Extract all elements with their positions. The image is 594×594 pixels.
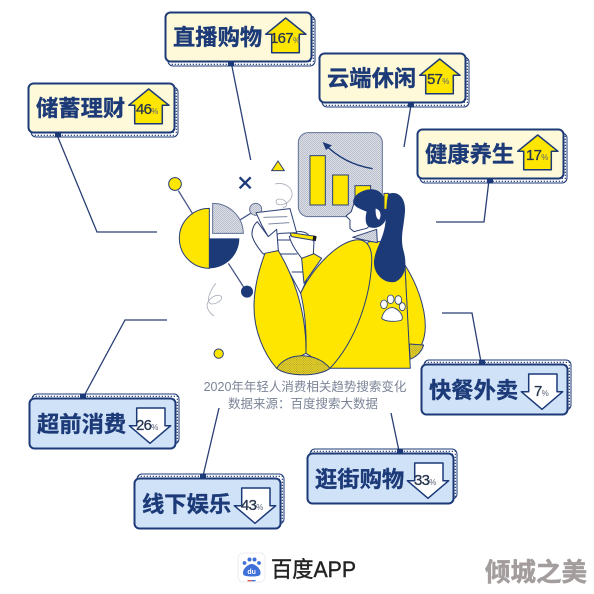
label: 直播购物 +167%: 直播购物 bbox=[173, 25, 262, 50]
paw print bbox=[381, 295, 405, 321]
source caption: 2020年年轻人消费相关趋势搜索变化 bbox=[204, 379, 407, 394]
left hand bbox=[252, 222, 278, 254]
icon: cross bbox=[240, 177, 251, 188]
label: 云端休闲 +57% bbox=[320, 54, 469, 107]
label: 超前消费 -26% bbox=[30, 394, 179, 448]
label: 云端休闲 +57%: 57% bbox=[427, 71, 449, 88]
label: 逛街购物 -33%: 33% bbox=[414, 472, 436, 489]
rear sleeve bbox=[405, 265, 425, 359]
left sleeve bbox=[254, 251, 306, 368]
label: 储蓄理财 +46% bbox=[28, 84, 178, 137]
icon: triangle bbox=[272, 161, 284, 171]
small yellow circle bbox=[214, 349, 223, 358]
label: 线下娱乐 -43%: 线下娱乐 bbox=[142, 492, 231, 517]
label: 健康养生 +17%: 健康养生 bbox=[425, 141, 514, 167]
source caption: 数据来源：百度搜索大数据 bbox=[228, 396, 378, 411]
logo text: 百度APP bbox=[271, 557, 356, 582]
face bbox=[346, 203, 377, 232]
logo: Baidu APP bbox=[238, 553, 356, 582]
label: 线下娱乐 -43% bbox=[134, 474, 284, 528]
label: 快餐外卖 -7% bbox=[422, 360, 571, 414]
icon: Baidu paw: du bbox=[247, 569, 256, 576]
source caption bbox=[204, 379, 407, 411]
person bbox=[252, 189, 425, 375]
label: 快餐外卖 -7%: 快餐外卖 bbox=[429, 378, 518, 403]
body bbox=[330, 242, 410, 368]
hair bbox=[353, 189, 387, 228]
label: 超前消费 -26%: 超前消费 bbox=[37, 412, 126, 437]
notepad bbox=[256, 209, 297, 237]
chart panel bbox=[298, 133, 382, 217]
label: 逛街购物 -33%: 逛街购物 bbox=[315, 467, 404, 492]
arm stripes bbox=[277, 230, 307, 293]
label: 逛街购物 -33% bbox=[308, 449, 457, 504]
label: 云端休闲 +57%: 云端休闲 bbox=[327, 66, 416, 91]
label: 储蓄理财 +46%: 储蓄理财 bbox=[36, 96, 125, 121]
label: 快餐外卖 -7%: 7% bbox=[534, 383, 549, 400]
label: 健康养生 +17%: 17% bbox=[526, 147, 548, 164]
label: 直播购物 +167%: 167% bbox=[270, 30, 300, 47]
right hand bbox=[289, 232, 314, 258]
collar bbox=[353, 229, 377, 243]
label: 线下娱乐 -43%: 43% bbox=[241, 497, 263, 514]
hem bbox=[277, 356, 330, 375]
pie chart bbox=[169, 178, 262, 298]
label: 健康养生 +17% bbox=[418, 130, 567, 183]
label: 超前消费 -26%: 26% bbox=[136, 417, 158, 434]
right big sleeve bbox=[301, 240, 372, 368]
second sleeve bbox=[302, 253, 322, 283]
label: 直播购物 +167% bbox=[166, 12, 315, 66]
watermark: 倾城之美 bbox=[485, 558, 587, 587]
connector lines bbox=[57, 64, 489, 476]
central illustration bbox=[169, 133, 425, 375]
label: 储蓄理财 +46%: 46% bbox=[136, 101, 158, 118]
decorative squiggles bbox=[207, 184, 292, 316]
pen bbox=[290, 233, 316, 241]
